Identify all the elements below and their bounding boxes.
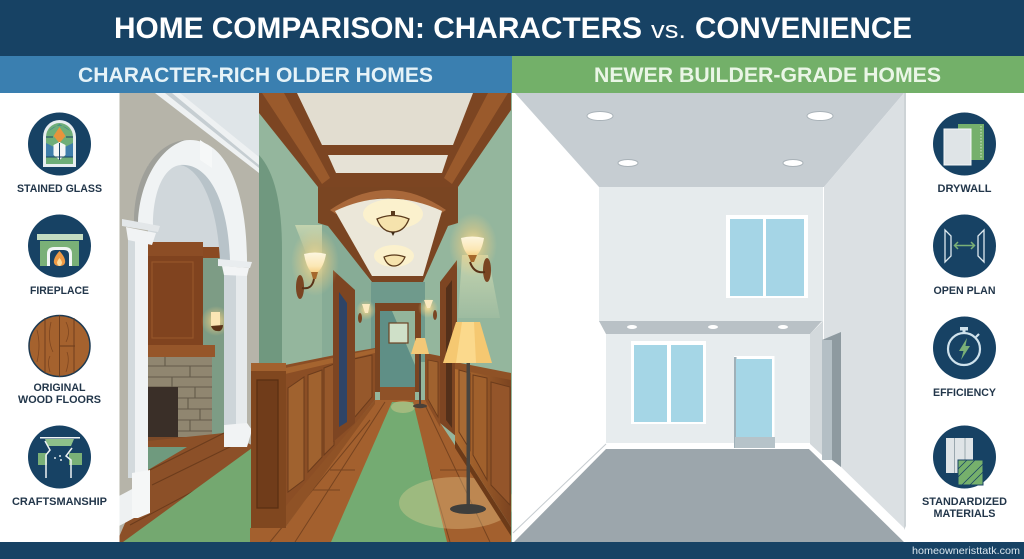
back wall [599, 187, 823, 460]
floor [250, 400, 515, 542]
label: fireplace: FIREPLACE [30, 285, 89, 297]
label: original wood floors [18, 382, 101, 406]
icon: efficiency stopwatch [933, 316, 996, 380]
lower window [631, 341, 706, 424]
footer band [0, 542, 1024, 559]
right hall door [440, 260, 457, 437]
label: craftsmanship: CRAFTSMANSHIP [12, 496, 107, 508]
ceiling lights [363, 199, 423, 267]
label: open plan: OPEN PLAN [934, 285, 996, 297]
far left wall recess [259, 155, 282, 364]
icon: fireplace [28, 214, 91, 278]
label: standardized materials: MATERIALS [934, 508, 996, 520]
floor and rug [119, 433, 252, 542]
icon: craftsmanship [28, 426, 91, 488]
icon: open plan [933, 214, 996, 278]
left column header [0, 56, 512, 93]
white right sidebar [904, 93, 1024, 542]
left large wall sconce [291, 228, 339, 299]
right column header: NEWER BUILDER-GRADE HOMES [594, 64, 941, 87]
fireplace stone [148, 357, 212, 441]
side doorway [822, 332, 841, 467]
glass door [734, 356, 775, 448]
right large wall sconce [449, 213, 497, 282]
title: vs. [651, 17, 686, 44]
label: standardized materials: STANDARDIZED [922, 496, 1007, 508]
soffit [599, 321, 822, 334]
right column [218, 259, 252, 447]
illustration: archway and fireplace room [119, 93, 260, 542]
footer band: homeowneristtatk.com [912, 545, 1020, 557]
wall sconce in side room [201, 306, 231, 336]
label: original wood floors: ORIGINAL [34, 382, 86, 394]
fireplace overmantel [148, 242, 225, 440]
label: stained glass: STAINED GLASS [17, 183, 102, 195]
label: original wood floors: WOOD FLOORS [18, 394, 101, 406]
label: standardized materials [922, 496, 1007, 520]
title: HOME COMPARISON: CHARACTERS [114, 12, 642, 45]
icon: original wood floors [29, 315, 90, 377]
floor and baseboards [512, 443, 904, 542]
baseboard [119, 488, 134, 526]
recessed lights [587, 112, 833, 329]
near floor lamp [443, 322, 492, 514]
illustration: character hallway [250, 93, 515, 542]
arched ceiling beam [318, 187, 458, 282]
ceiling frame [259, 93, 511, 187]
right column header [512, 56, 1024, 93]
icon: stained glass [28, 112, 91, 176]
ceiling [515, 93, 904, 187]
arch trim [134, 140, 247, 262]
left wainscot [251, 348, 375, 528]
left column [122, 219, 160, 518]
title: CONVENIENCE [695, 12, 912, 45]
illustration: builder-grade room [512, 93, 905, 542]
icon: drywall [933, 112, 996, 176]
upper window [726, 215, 808, 298]
left hall door [333, 270, 355, 442]
white left sidebar [0, 93, 120, 542]
label: drywall: DRYWALL [938, 183, 992, 195]
right wainscot [425, 353, 511, 536]
left column header: CHARACTER-RICH OLDER HOMES [78, 64, 433, 87]
small far sconces [356, 298, 438, 323]
far floor lamp [411, 338, 429, 408]
end wall and door [371, 282, 425, 400]
header band [0, 0, 1024, 56]
right wall [824, 93, 904, 530]
wall light cones [295, 225, 500, 318]
label: efficiency: EFFICIENCY [933, 387, 997, 399]
icon: standardized materials [933, 426, 996, 488]
